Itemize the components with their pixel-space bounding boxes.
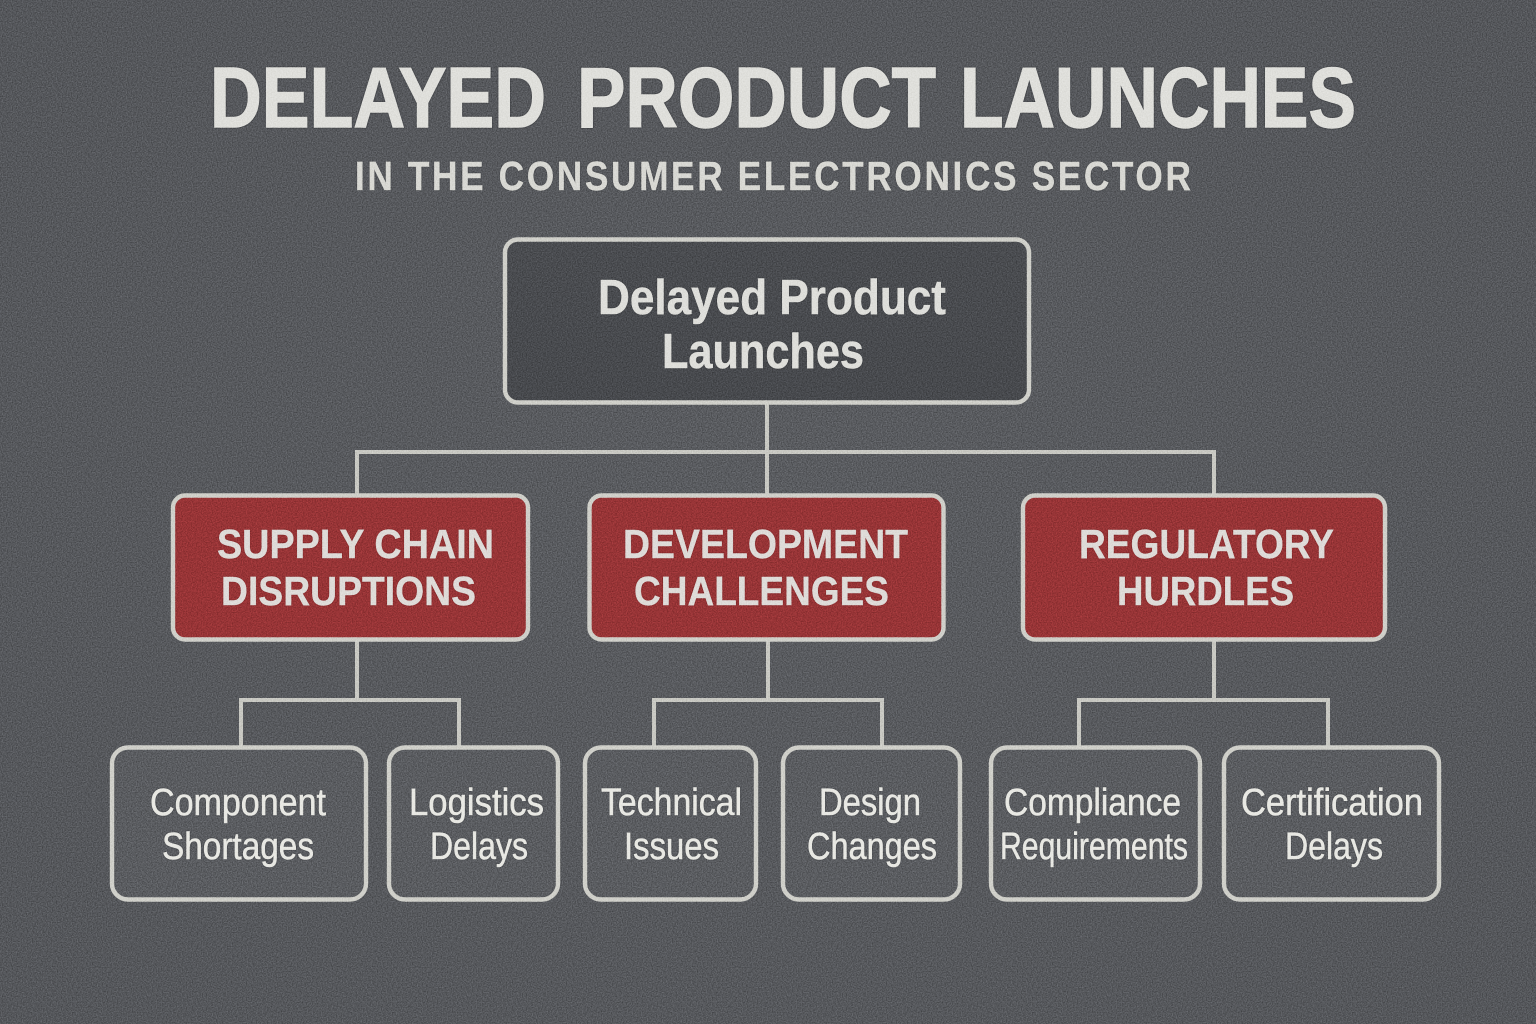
leaf box: Technical Issues: Issues — [624, 826, 719, 868]
leaf box: Compliance Requirements: Requirements — [1000, 826, 1188, 868]
title: LAUNCHES — [960, 51, 1356, 146]
category box: Development Challenges: DEVELOPMENT — [623, 521, 908, 567]
root box: Delayed Product Launches — [505, 240, 1029, 402]
title — [210, 51, 1356, 146]
connector lines: root to categories — [357, 403, 1214, 494]
leaf box: Component Shortages — [112, 748, 366, 900]
category box: Supply Chain Disruptions: SUPPLY CHAIN — [217, 521, 494, 567]
leaf box: Technical Issues — [585, 748, 756, 900]
category box: Regulatory Hurdles — [1023, 496, 1385, 640]
leaf box: Design Changes — [783, 748, 960, 900]
title: DELAYED — [210, 51, 546, 146]
leaf box: Technical Issues: Technical — [601, 782, 742, 824]
category box: Supply Chain Disruptions — [173, 496, 528, 640]
category box: Development Challenges — [590, 496, 944, 640]
leaf box: Design Changes: Design — [819, 782, 921, 824]
category box: Regulatory Hurdles: HURDLES — [1117, 568, 1294, 614]
connector lines: supply chain to leaves — [241, 640, 459, 746]
leaf box: Certification Delays: Certification — [1241, 782, 1423, 824]
leaf box: Compliance Requirements — [991, 748, 1200, 900]
title: PRODUCT — [577, 51, 936, 146]
leaf box: Compliance Requirements: Compliance — [1004, 782, 1181, 824]
category box: Regulatory Hurdles: REGULATORY — [1079, 521, 1334, 567]
connector lines: regulatory to leaves — [1079, 640, 1328, 746]
leaf box: Certification Delays: Delays — [1285, 826, 1383, 868]
root box: Delayed Product Launches: Delayed Product — [598, 271, 946, 325]
connector lines: development to leaves — [654, 640, 882, 746]
leaf box: Design Changes: Changes — [807, 826, 937, 868]
subtitle: IN THE CONSUMER ELECTRONICS SECTOR — [355, 154, 1191, 200]
leaf box: Component Shortages: Component — [150, 782, 326, 824]
leaf box: Certification Delays — [1224, 748, 1439, 900]
leaf box: Logistics Delays: Logistics — [409, 782, 544, 824]
leaf box: Logistics Delays: Delays — [430, 826, 528, 868]
category box: Development Challenges: CHALLENGES — [634, 568, 889, 614]
leaf box: Component Shortages: Shortages — [162, 826, 314, 868]
category box: Supply Chain Disruptions: DISRUPTIONS — [221, 568, 476, 614]
root box: Delayed Product Launches: Launches — [662, 325, 864, 379]
leaf box: Logistics Delays — [389, 748, 558, 900]
